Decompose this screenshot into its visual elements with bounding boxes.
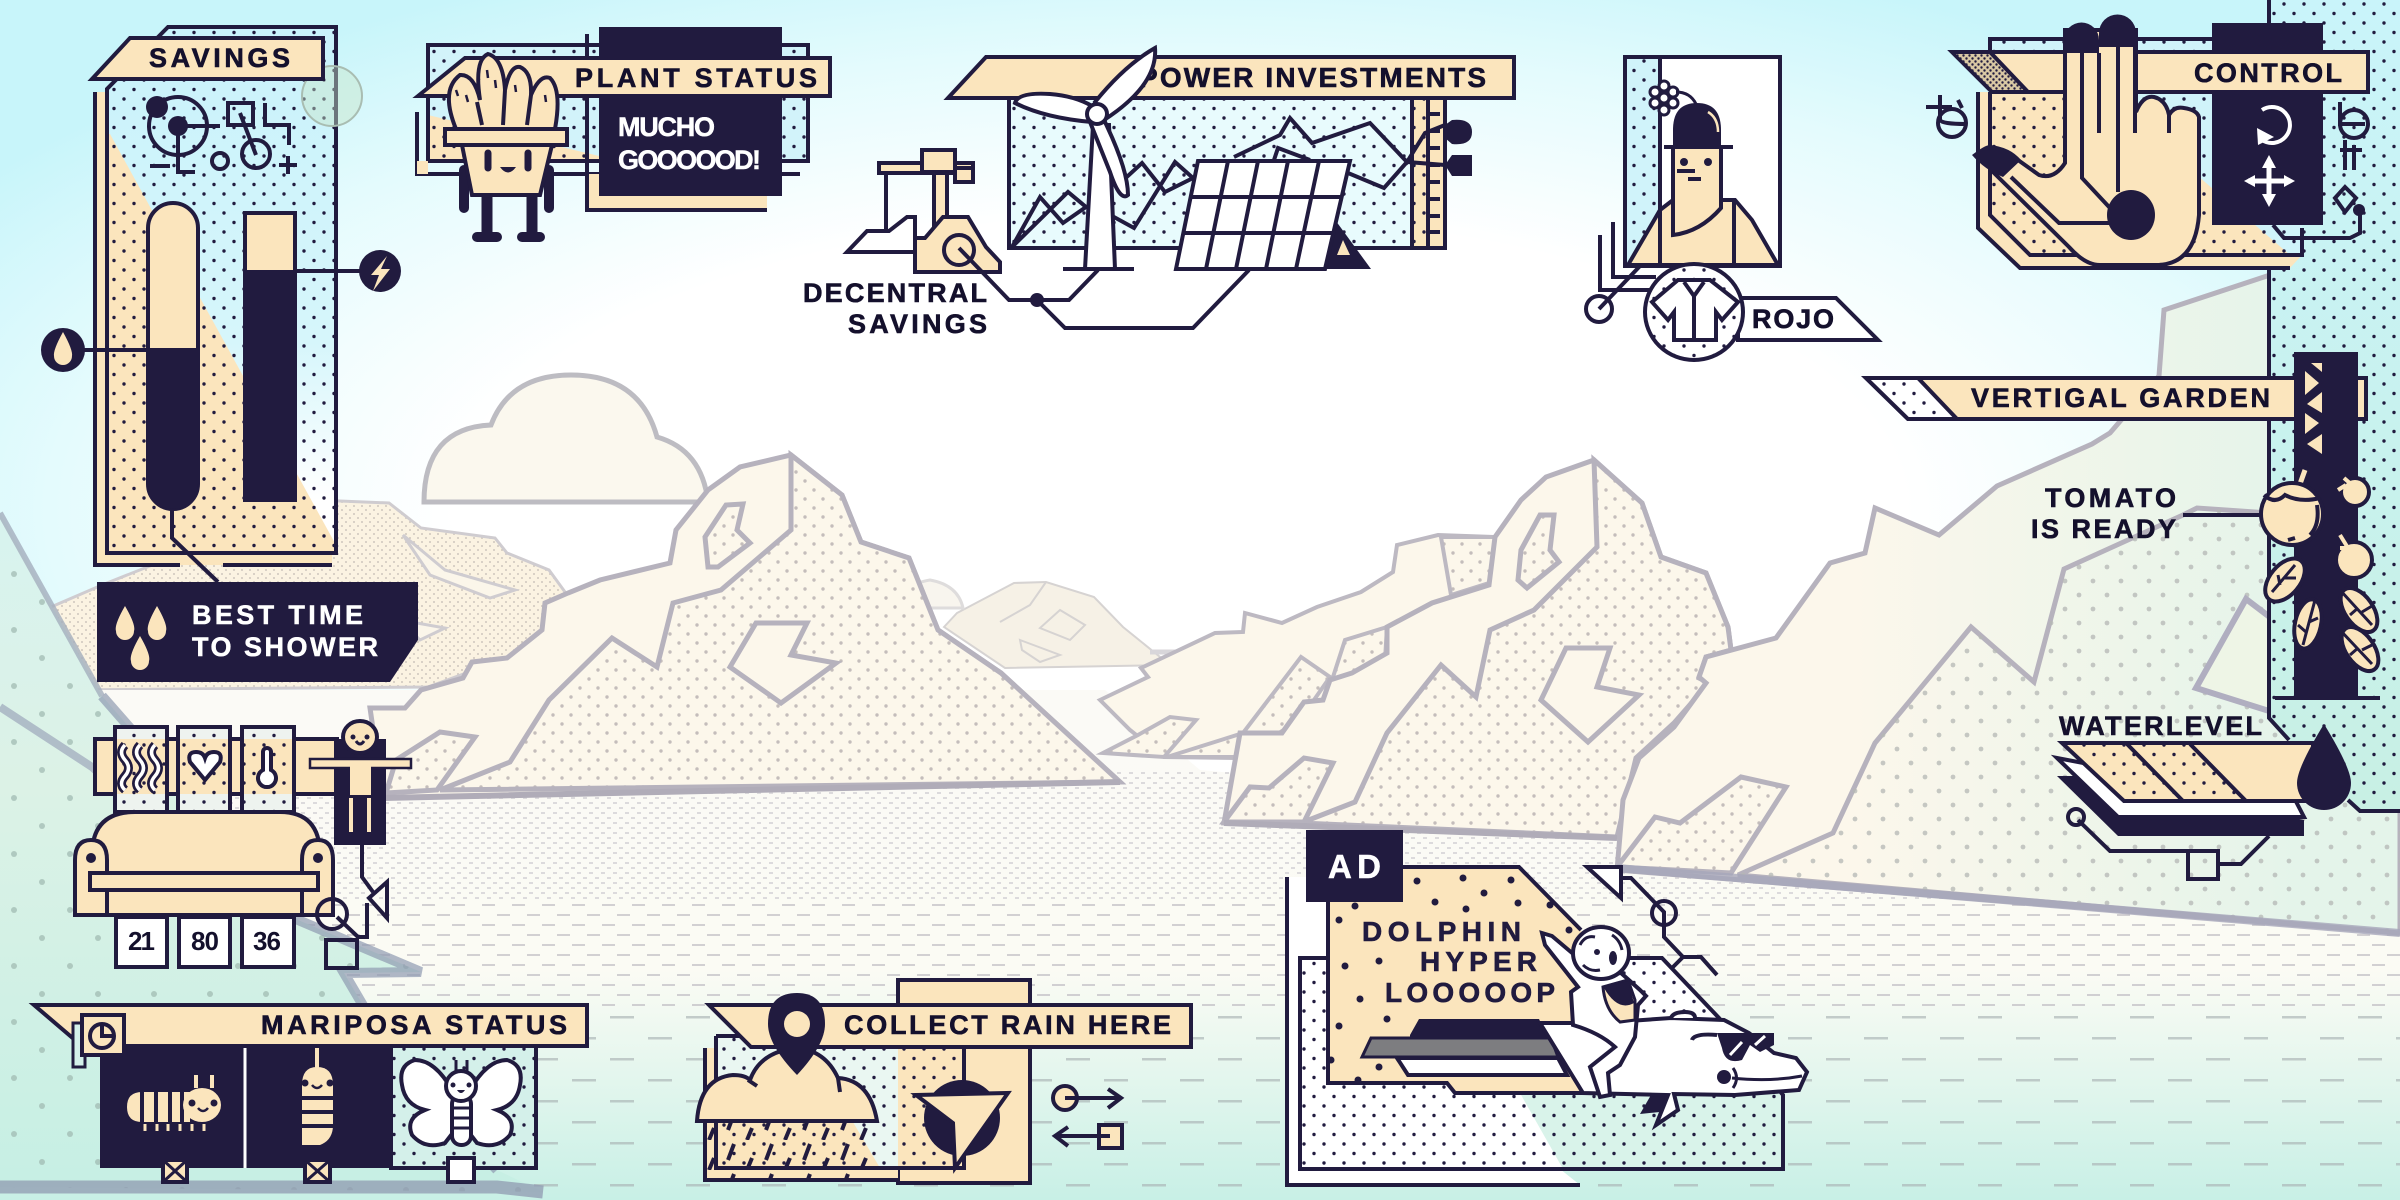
icon: heart [189, 752, 221, 780]
control banner: CONTROL [2194, 58, 2342, 88]
icon: clock [73, 1015, 124, 1067]
right mountain [1617, 275, 2400, 933]
line chart [1012, 118, 1445, 247]
panel: waterlevel [2057, 711, 2351, 879]
garden column [2275, 352, 2380, 698]
status text [618, 112, 761, 175]
icon: thermometer [258, 748, 276, 787]
central left mountain [370, 455, 1120, 798]
top circuit [1587, 867, 1717, 975]
plant back panel [417, 34, 808, 210]
icon: location pin [768, 993, 825, 1075]
value boxes: 80 [191, 926, 219, 956]
panel: advertisement dolphin hyperloop [1287, 830, 1807, 1185]
chart markers [1445, 120, 1472, 176]
chart panel [1009, 98, 1445, 248]
status text: MUCHO [618, 112, 715, 142]
cocoon [302, 1048, 334, 1145]
ad tag [1306, 830, 1403, 902]
sensor cards [115, 727, 294, 812]
cloud icon [697, 1048, 877, 1121]
circuit icon [146, 96, 297, 174]
value boxes: 36 [253, 926, 281, 956]
portrait frame [1625, 57, 1780, 266]
icon: water drop [41, 328, 148, 372]
callout: tomato is ready: TOMATO [2045, 483, 2176, 513]
panel: mariposa status [34, 1005, 587, 1182]
panel: right dotted column [2269, 0, 2400, 811]
flow arrows [1053, 1086, 1122, 1148]
icon: rotate [2257, 107, 2290, 145]
label: decentral savings [803, 278, 987, 339]
panel: vertical garden [1866, 352, 2386, 698]
mariposa banner: MARIPOSA STATUS [261, 1010, 567, 1040]
rojo label [1738, 298, 1878, 340]
label: decentral savings: SAVINGS [848, 309, 987, 339]
icon: big drop [2297, 724, 2351, 810]
icon: flower [1650, 81, 1696, 115]
callout: best time to shower [97, 582, 418, 682]
dolphin [1540, 1012, 1807, 1125]
panel: plant status [417, 27, 830, 237]
water circuit [2068, 809, 2269, 879]
back mountain center right [1100, 535, 1495, 758]
rain back panel [705, 1036, 964, 1180]
stage panels [100, 1046, 536, 1168]
label: decentral savings: DECENTRAL [803, 278, 987, 308]
callout: best time to shower: TO SHOWER [192, 632, 378, 662]
water gauge [148, 203, 198, 509]
panel: collect rain here [697, 980, 1191, 1183]
power banner [948, 57, 1514, 98]
butterfly [401, 1060, 521, 1145]
savings banner [92, 38, 323, 79]
panel: savings [41, 27, 401, 582]
icon: heat waves [122, 745, 158, 790]
person standing [310, 721, 411, 845]
mariposa banner [34, 1005, 587, 1046]
plant banner: PLANT STATUS [575, 63, 817, 93]
ad headline: DOLPHIN [1362, 916, 1521, 947]
mountain center right [1224, 460, 1731, 837]
savings panel body [107, 27, 336, 553]
value boxes: 21 [128, 926, 155, 956]
translucent circle [302, 66, 362, 126]
panel: couch [75, 721, 411, 968]
ad back shapes [1287, 877, 1783, 1185]
funnel icon [916, 1080, 1008, 1168]
savings banner: SAVINGS [149, 43, 290, 73]
panel: control [1926, 14, 2368, 268]
garden banner [1866, 378, 2366, 419]
far left mountain [51, 500, 565, 690]
wind turbine [1015, 48, 1155, 269]
water stack layers [2057, 743, 2313, 836]
energy gauge [245, 213, 295, 500]
left foreground hill [0, 513, 543, 1192]
garden banner: VERTIGAL GARDEN [1971, 383, 2270, 413]
ad tag: AD [1328, 848, 1381, 885]
status text: GOOOOOD! [618, 145, 761, 175]
couch circuit [317, 845, 387, 968]
callout: tomato is ready [2031, 483, 2261, 544]
icon: shirt [1645, 264, 1743, 360]
rider [1542, 927, 1646, 1097]
hand [1972, 14, 2199, 265]
solar panel [1176, 161, 1371, 269]
leaves [2257, 551, 2386, 678]
status box [599, 27, 782, 196]
rain banner [709, 1005, 1191, 1047]
cream tall panel [898, 980, 1030, 1183]
control box [2212, 23, 2323, 225]
far mountains and clouds [530, 580, 1358, 668]
control banner [1952, 52, 2368, 92]
control back panel [1978, 39, 2302, 268]
small circuit icons [1926, 95, 2368, 238]
rain [705, 1122, 877, 1180]
tomatoes [2261, 470, 2372, 578]
plant banner [418, 58, 830, 96]
ad headline [1362, 916, 1555, 1008]
sofa [75, 812, 333, 915]
couch strip [95, 739, 337, 794]
factory [847, 150, 1000, 272]
stage markers [163, 1158, 474, 1182]
cactus mascot [445, 54, 567, 237]
icon: move arrows [2244, 155, 2295, 207]
value boxes [116, 917, 294, 967]
rojo label: ROJO [1752, 304, 1834, 334]
speed stripes [1362, 1019, 1567, 1075]
waterlevel label: WATERLEVEL [2059, 711, 2262, 741]
base line of the central mountains [383, 782, 1617, 838]
icon: lightning [295, 250, 401, 292]
ground plane [0, 690, 2400, 1200]
caterpillar [127, 1075, 221, 1131]
callout: tomato is ready: IS READY [2031, 514, 2176, 544]
cloud [424, 375, 708, 502]
panel: rojo portrait [1586, 57, 1878, 360]
rain banner: COLLECT RAIN HERE [844, 1010, 1171, 1040]
panel: power investments [803, 48, 1514, 339]
ad headline: LOOOOOP [1385, 977, 1555, 1008]
ad cream card [1328, 867, 1600, 1093]
connection circuit [959, 248, 1249, 328]
left circuit [1586, 222, 1656, 322]
callout: best time to shower: BEST TIME [192, 600, 363, 630]
person [1628, 103, 1778, 265]
ad headline: HYPER [1420, 946, 1537, 977]
power banner: POWER INVESTMENTS [1139, 62, 1486, 93]
